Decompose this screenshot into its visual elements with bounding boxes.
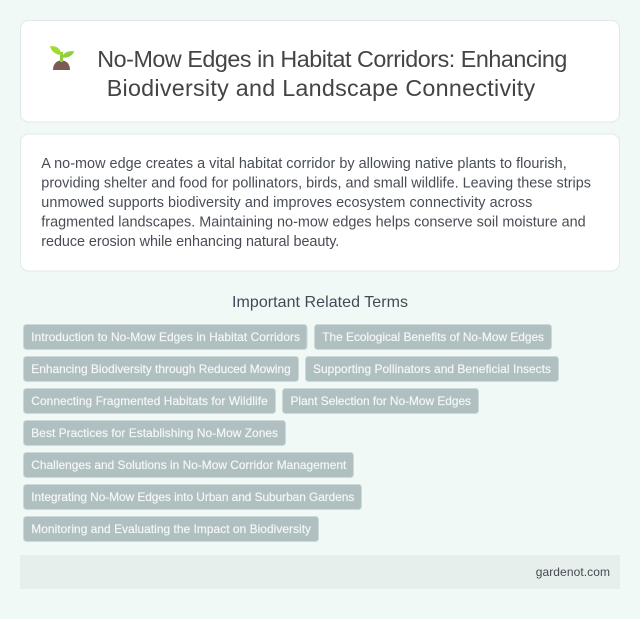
description text: fragmented landscapes. Maintaining no-mow edges helps conserve soil moisture and xyxy=(41,214,586,230)
panel: description xyxy=(20,134,620,271)
tag: introduction: Introduction to No-Mow Edges in Habitat Corridors xyxy=(31,330,300,344)
description text: unmowed supports biodiversity and improves ecosystem connectivity across xyxy=(41,195,532,211)
description text xyxy=(41,156,591,250)
title xyxy=(97,46,567,101)
title: No-Mow Edges in Habitat Corridors: Enhancing xyxy=(97,46,567,72)
tag: integrating xyxy=(24,484,362,510)
tag: challenges xyxy=(24,452,354,478)
footer: gardenot.com xyxy=(536,565,610,579)
tag: plant selection: Plant Selection for No-Mow Edges xyxy=(290,394,471,408)
tag: supporting pollinators xyxy=(306,356,558,382)
tag: best practices xyxy=(24,420,286,446)
tag: connecting habitats: Connecting Fragmented Habitats for Wildlife xyxy=(31,394,268,408)
panel: term tags xyxy=(24,324,558,542)
heading: related terms: Important Related Terms xyxy=(232,294,408,311)
tag: supporting pollinators: Supporting Pollinators and Beneficial Insects xyxy=(313,362,551,376)
tag: ecological benefits: The Ecological Benefits of No-Mow Edges xyxy=(322,330,544,344)
tag: best practices: Best Practices for Establishing No-Mow Zones xyxy=(31,426,278,440)
tag: monitoring: Monitoring and Evaluating the Impact on Biodiversity xyxy=(31,522,311,536)
title: Biodiversity and Landscape Connectivity xyxy=(107,75,536,101)
panel: title card xyxy=(20,20,620,122)
description text: reduce erosion while enhancing natural beauty. xyxy=(41,234,339,250)
description text: A no-mow edge creates a vital habitat corridor by allowing native plants to flourish, xyxy=(41,156,567,172)
tag: enhancing biodiversity: Enhancing Biodiversity through Reduced Mowing xyxy=(31,362,291,376)
tag: plant selection xyxy=(282,388,478,414)
description text: providing shelter and food for pollinators, birds, and small wildlife. Leaving these strips xyxy=(41,176,591,192)
tag: connecting habitats xyxy=(24,388,276,414)
footer xyxy=(20,555,620,589)
tag: ecological benefits xyxy=(314,324,552,350)
tag: introduction xyxy=(24,324,307,350)
icon: sprout xyxy=(50,46,74,70)
tag: enhancing biodiversity xyxy=(24,356,298,382)
tag: monitoring xyxy=(24,516,318,542)
tag: integrating: Integrating No-Mow Edges into Urban and Suburban Gardens xyxy=(31,490,354,504)
tag: challenges: Challenges and Solutions in No-Mow Corridor Management xyxy=(31,458,347,472)
